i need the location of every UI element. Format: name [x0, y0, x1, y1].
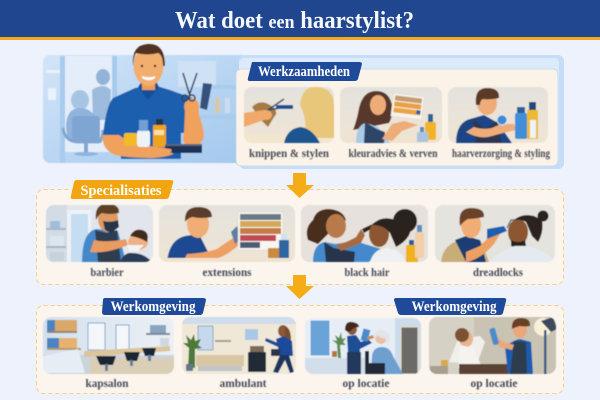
card: haarverzorging en styling [448, 87, 550, 160]
card: extensions [159, 205, 295, 279]
label: barbier [90, 265, 124, 279]
label: black hair [344, 265, 390, 279]
label: dreadlocks [473, 265, 523, 279]
label: op locatie [342, 376, 390, 390]
label: extensions [202, 265, 252, 279]
card: black hair [301, 205, 428, 279]
arrow: down 1 [286, 173, 314, 198]
stylist shirt [103, 86, 198, 159]
panel: hero hairstylist [43, 44, 248, 163]
panel: werkzaamheden [236, 55, 564, 169]
tray [165, 145, 202, 153]
products [124, 133, 137, 146]
stylist head [142, 72, 155, 90]
card: kleuradvies en verven [340, 87, 442, 160]
scissors [182, 73, 197, 101]
card: kapsalon [43, 317, 174, 390]
heading: specialisaties: Specialisaties [80, 183, 162, 199]
chair silhouette [71, 90, 89, 110]
card: barbier [46, 204, 153, 279]
card: ambulant [182, 317, 296, 390]
label: ambulant [220, 376, 266, 390]
label: haarverzorging & styling [452, 146, 550, 160]
card: op locatie 2 [429, 317, 557, 390]
title: Wat doet een haarstylist? [175, 8, 414, 34]
forearm and hand [183, 98, 204, 146]
heading: werkomgeving left: Werkomgeving [110, 299, 196, 315]
comb [200, 83, 212, 110]
card: op locatie 1 [305, 318, 421, 390]
arrow: down 2 [286, 275, 314, 299]
panel: werkomgeving [36, 298, 564, 394]
arm [103, 135, 173, 158]
panel: specialisaties [36, 180, 564, 284]
card: dreadlocks [435, 205, 555, 279]
label: knippen & stylen [249, 146, 329, 160]
header banner [0, 0, 600, 40]
label: kleuradvies & verven [348, 146, 438, 160]
label: kapsalon [86, 376, 129, 390]
heading: specialisaties [71, 180, 173, 199]
heading: werkomgeving right: Werkomgeving [412, 299, 497, 315]
card: knippen en stylen [244, 87, 334, 160]
label: op locatie [470, 376, 518, 390]
heading: werkzaamheden: Werkzaamheden [258, 64, 351, 80]
stylist silhouette [96, 69, 110, 85]
